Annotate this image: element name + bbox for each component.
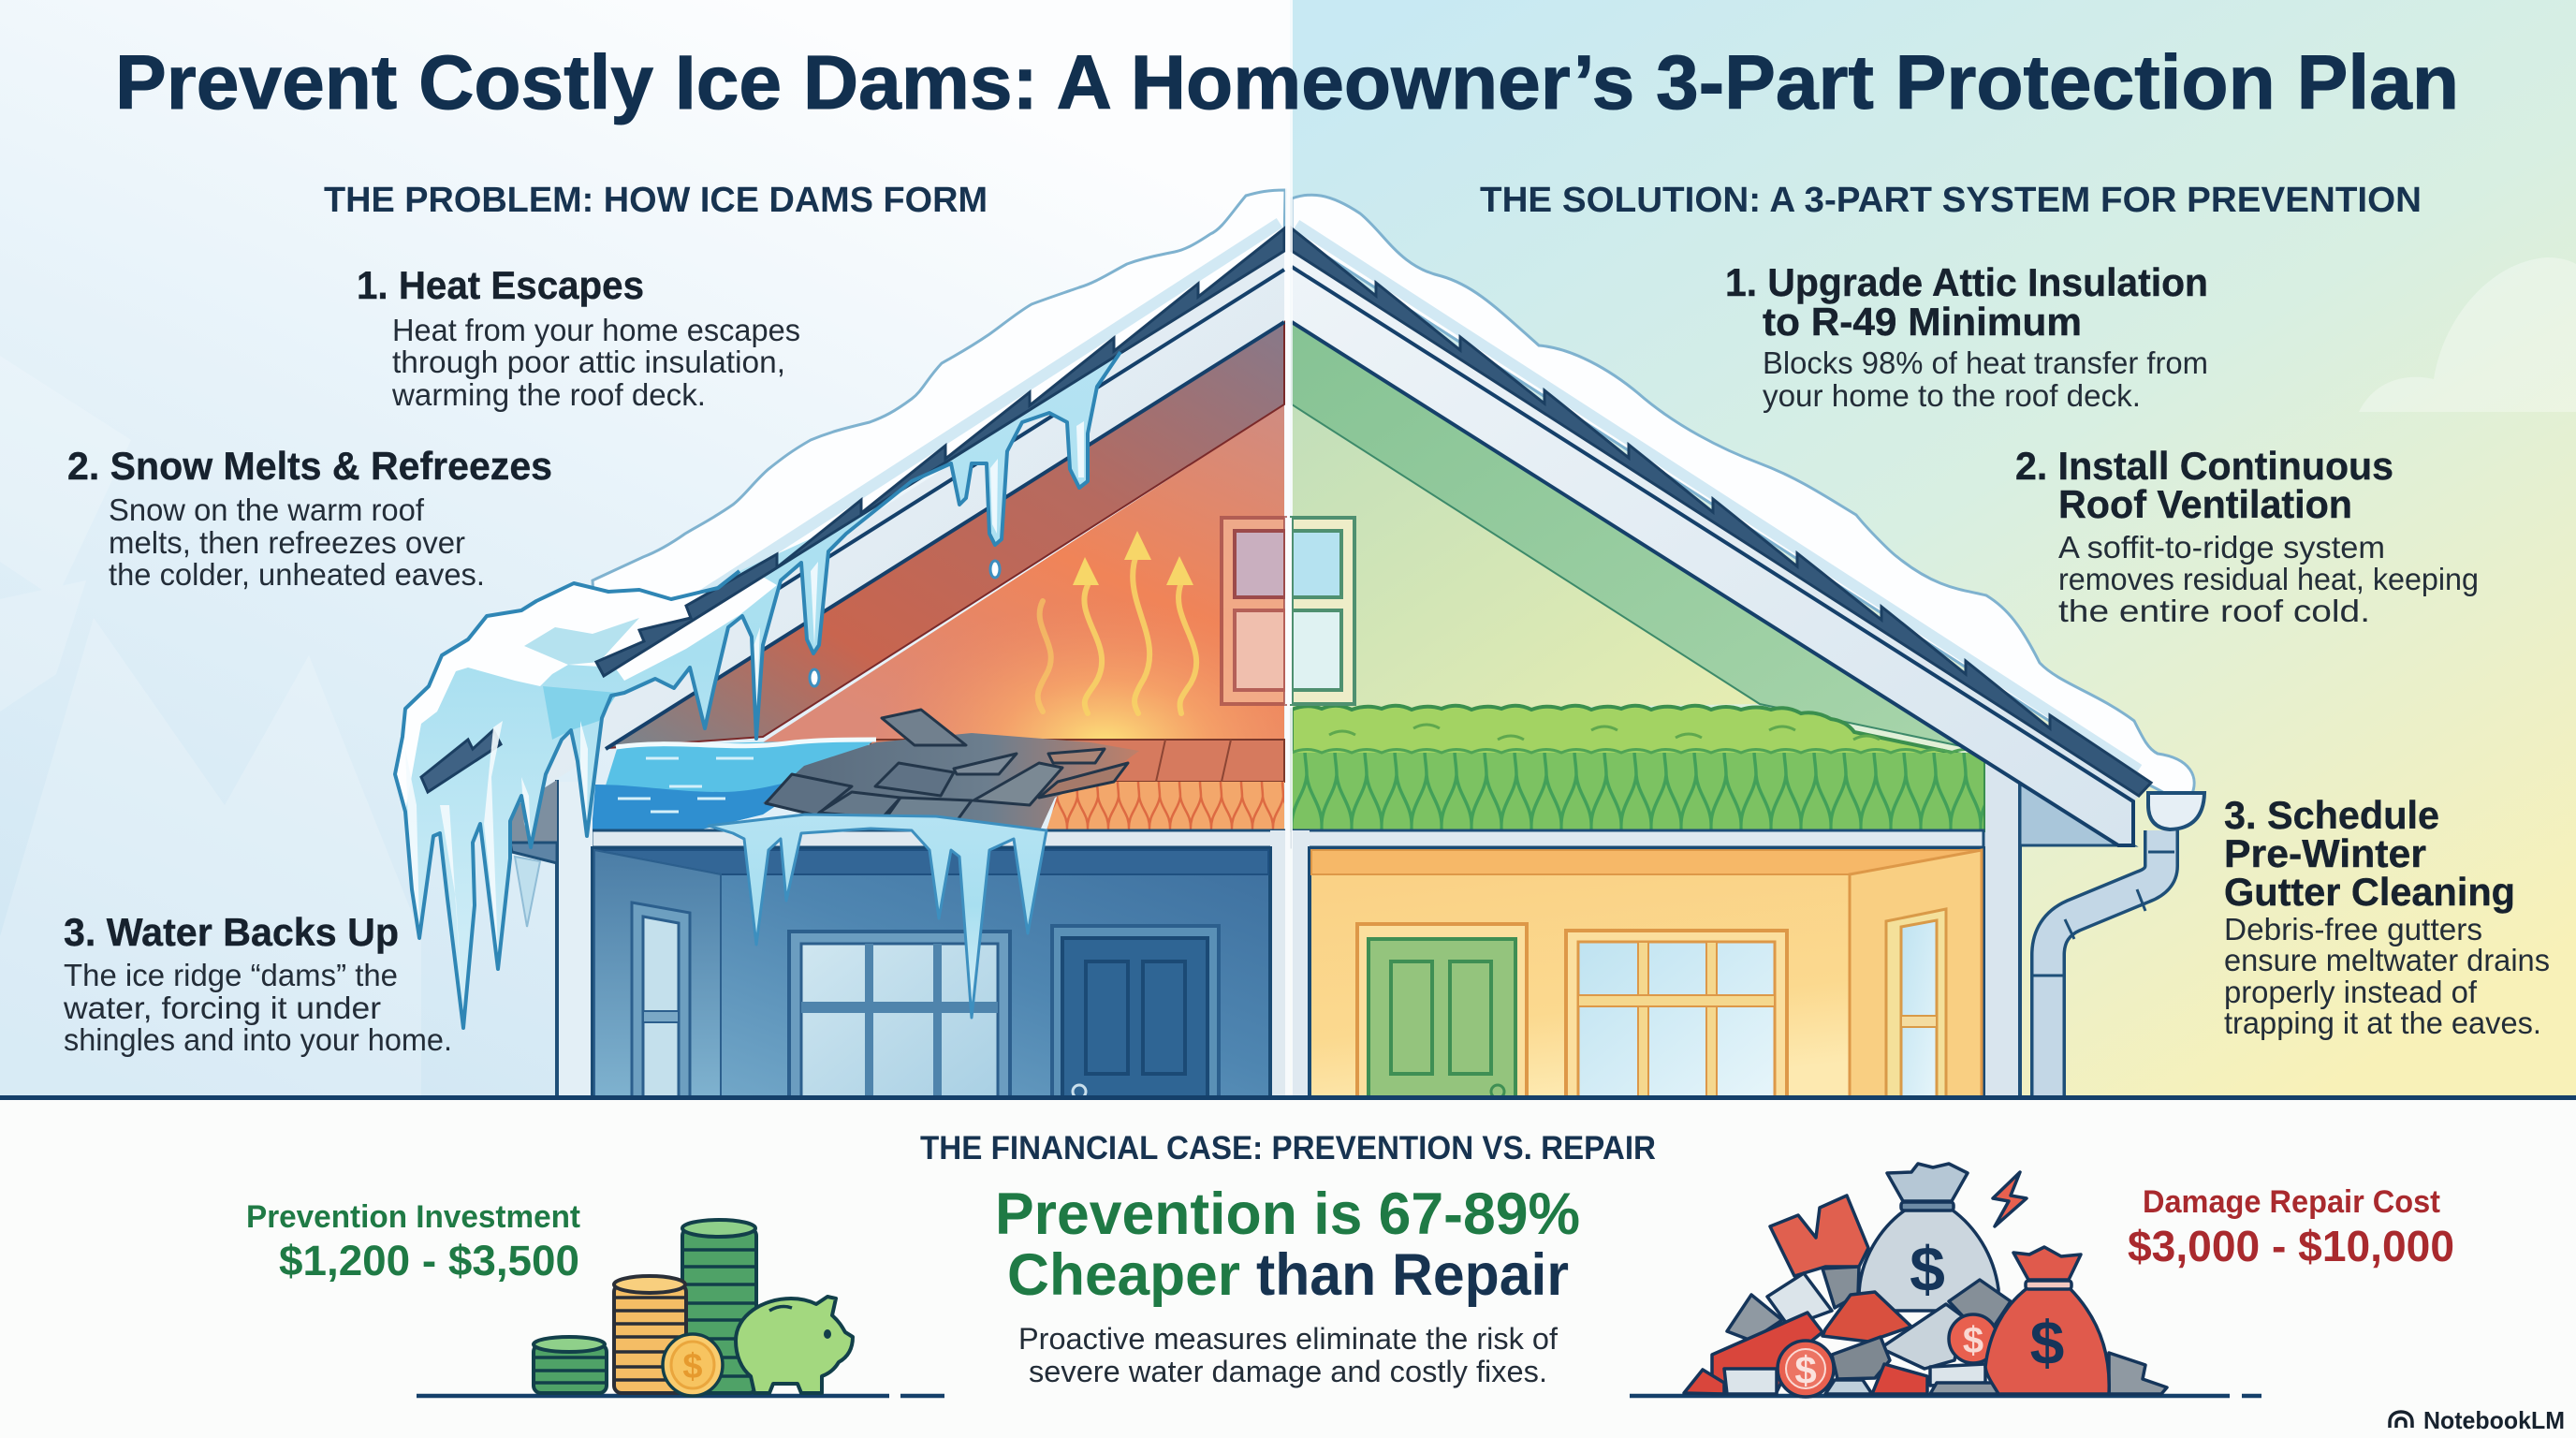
window (1566, 931, 1787, 1098)
problem step 3 (63, 910, 452, 1057)
red shingle strip (871, 740, 1284, 782)
tall green stack (682, 1220, 756, 1393)
lower pane: warm (1235, 610, 1285, 690)
snow cap on ice (395, 573, 777, 812)
house: problem side (395, 190, 1290, 1100)
door (1052, 926, 1219, 1098)
silver money bag (1859, 1164, 1998, 1311)
short green stack (534, 1337, 607, 1393)
lower icicles (709, 814, 1046, 1018)
beam (1292, 830, 1983, 847)
ground line (0, 1095, 2576, 1100)
side window (632, 902, 690, 1098)
pooled water (592, 740, 876, 830)
headline comparison: Prevention is 67-89% (995, 1181, 1580, 1247)
decorative ice mountains (0, 356, 421, 1097)
attic window across the divide (1222, 518, 1354, 704)
financial note: Proactive measures eliminate the risk of (1018, 1322, 1558, 1356)
side wall (1850, 850, 1982, 1098)
NotebookLM logo: NotebookLM (2423, 1406, 2565, 1434)
window (789, 932, 1010, 1098)
damaged shingles (763, 710, 1139, 830)
side window (1886, 909, 1946, 1098)
problem step 3: shingles and into your home. (64, 1022, 452, 1057)
beam (592, 830, 1284, 847)
solution step 1: to R-49 Minimum (1763, 300, 2082, 344)
upper pane: cool (1292, 531, 1341, 597)
solution step 1: your home to the roof deck. (1763, 378, 2141, 413)
post line (2018, 781, 2022, 1099)
problem step 2: the colder, unheated eaves. (109, 557, 485, 592)
financial note (1018, 1322, 1558, 1388)
solution step 3: ensure meltwater drains (2224, 943, 2550, 977)
problem step 2: melts, then refreezes over (109, 525, 465, 560)
headline comparison (995, 1181, 1580, 1308)
financial panel background (0, 1100, 2576, 1438)
lower pane: cool (1292, 610, 1341, 690)
roof snow (593, 190, 1285, 679)
damage repair figure: $3,000 - $10,000 (2128, 1222, 2454, 1270)
problem step 1: 1. Heat Escapes (357, 263, 644, 307)
solution step 3: properly instead of (2224, 975, 2478, 1009)
baseline (417, 1394, 944, 1398)
attic underside band (1292, 322, 1983, 759)
coin stacks and piggy bank illustration (417, 1220, 944, 1396)
room (1310, 848, 1983, 1100)
door (1357, 924, 1527, 1098)
downspout (2031, 830, 2174, 1100)
snow shadow (618, 223, 1280, 650)
right post (1270, 830, 1290, 1100)
solution step 3: Debris-free gutters (2224, 912, 2482, 946)
problem step 3: water, forcing it under (63, 990, 381, 1025)
ice mass and icicles (395, 352, 1120, 1028)
room (593, 848, 1270, 1100)
background: problem side (0, 0, 1290, 1100)
side wall (594, 850, 721, 1098)
red broken plank (1770, 1196, 1868, 1276)
solution step 3: trapping it at the eaves. (2224, 1005, 2541, 1040)
financial note: severe water damage and costly fixes. (1029, 1355, 1547, 1388)
eave shingles lower (421, 730, 501, 792)
headline comparison: Cheaper (1007, 1242, 1240, 1308)
center divider (1285, 0, 1293, 1097)
solution step 2: 2. Install Continuous (2015, 444, 2393, 488)
solution step 2: Roof Ventilation (2058, 482, 2352, 526)
ceiling (594, 850, 1268, 874)
attic interior (1292, 404, 1760, 712)
left post (1292, 830, 1310, 1100)
problem step 2: Snow on the warm roof (109, 492, 425, 527)
problem step 1: warming the roof deck. (391, 377, 706, 412)
problem step 2 (67, 444, 552, 592)
red coins: $ (1794, 1348, 1817, 1392)
ceiling (1311, 850, 1982, 874)
ice highlights (405, 421, 1084, 1020)
attic band (607, 322, 1284, 748)
silver money bag: $ (1910, 1234, 1945, 1305)
snow on right roof (1292, 195, 2194, 800)
batt wavy top (1292, 749, 1981, 753)
upper pane: warm (1235, 531, 1285, 597)
roof fascia (505, 251, 1284, 782)
background: solution side (1290, 0, 2576, 1100)
window frame: cool half (1292, 518, 1354, 704)
falling drops (810, 561, 1000, 686)
cloud (2359, 257, 2576, 412)
problem step 1: through poor attic insulation, (392, 345, 785, 379)
deep ice center (543, 686, 618, 740)
prevention investment figure (246, 1199, 580, 1284)
wall post (557, 782, 593, 1100)
solution step 3: 3. Schedule (2224, 793, 2439, 837)
ice outline (395, 352, 1120, 1028)
solution step 2: the entire roof cold. (2058, 594, 2370, 628)
problem step 2: 2. Snow Melts & Refreezes (67, 444, 552, 488)
heat glow (763, 404, 1284, 742)
pale hanging icicle (515, 857, 540, 927)
heading: the solution: THE SOLUTION: A 3-PART SYSTEM FOR PREVENTION (1480, 181, 2422, 220)
fascia lines (1292, 267, 2133, 845)
heading: the problem: THE PROBLEM: HOW ICE DAMS FORM (324, 181, 988, 220)
fluff texture (1329, 725, 1880, 740)
gold stack (614, 1276, 686, 1393)
problem step 3: 3. Water Backs Up (64, 910, 399, 954)
wall post (1983, 763, 2020, 1100)
textured ice patch (524, 618, 639, 665)
attic interior (763, 404, 1284, 742)
solution step 1: 1. Upgrade Attic Insulation (1725, 260, 2208, 304)
fluffy insulation top (1292, 706, 1983, 830)
soffit slab (510, 843, 557, 863)
eave shingles upper (596, 228, 1284, 676)
red coins: $ (1963, 1320, 1983, 1361)
insulation batts (1292, 753, 1983, 830)
problem step 1: Heat from your home escapes (392, 313, 800, 347)
gold coin: $ (682, 1347, 703, 1387)
piggy bank (736, 1297, 853, 1393)
solution step 3: Gutter Cleaning (2224, 870, 2515, 914)
prevention investment figure: $1,200 - $3,500 (279, 1237, 579, 1284)
fascia lines (524, 270, 1284, 749)
solution step 3: Pre-Winter (2224, 831, 2426, 875)
gold coin (663, 1334, 723, 1396)
solution step 2: removes residual heat, keeping (2058, 562, 2479, 596)
lightning spark (1993, 1172, 2027, 1226)
red coins (1778, 1314, 1998, 1397)
damage repair figure (2128, 1184, 2454, 1270)
problem step 1 (357, 263, 800, 412)
solution step 2: A soffit-to-ridge system (2058, 530, 2385, 565)
house: solution side (1292, 195, 2204, 1100)
baseline (1630, 1394, 2261, 1398)
post line (555, 780, 559, 1098)
snow shadow (1296, 225, 2139, 770)
debris and money bags illustration (1630, 1164, 2261, 1397)
shingles (1292, 228, 2151, 796)
prevention investment figure: Prevention Investment (246, 1199, 580, 1235)
solution step 2 (2015, 444, 2479, 628)
roof fascia (1292, 251, 2144, 845)
problem step 3: The ice ridge “dams” the (64, 958, 398, 992)
financial heading: THE FINANCIAL CASE: PREVENTION VS. REPAIR (920, 1130, 1656, 1167)
title: Prevent Costly Ice Dams: A Homeowner’s 3-Part Protection Plan (115, 40, 2459, 125)
debris shards (1684, 1267, 2167, 1394)
solution step 1 (1725, 260, 2208, 413)
soffit (2020, 781, 2133, 845)
solution step 3 (2224, 793, 2550, 1040)
red money bag: $ (2030, 1308, 2064, 1377)
damage repair figure: Damage Repair Cost (2143, 1184, 2440, 1220)
orange insulation (1046, 782, 1284, 830)
red money bag (1985, 1247, 2109, 1394)
soffit (510, 780, 557, 843)
gutter (2148, 793, 2204, 829)
divider through window (1285, 518, 1292, 704)
headline comparison: than Repair (1256, 1242, 1569, 1308)
strip joints (1156, 740, 1231, 782)
window frame: warm half (1222, 518, 1285, 704)
heat arrows (1038, 531, 1196, 713)
solution step 1: Blocks 98% of heat transfer from (1763, 345, 2208, 380)
